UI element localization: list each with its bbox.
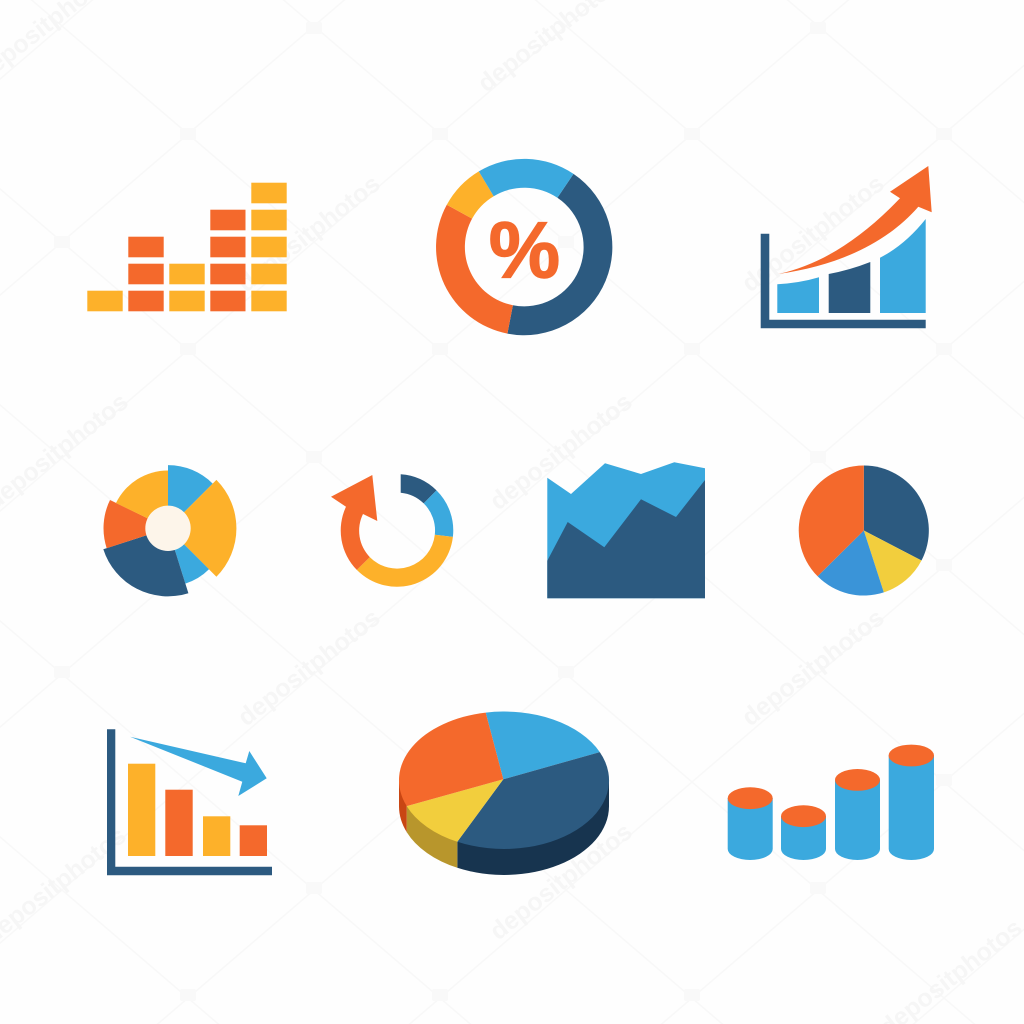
rising arrow bbox=[778, 166, 932, 274]
icon: circular refresh arrow bbox=[331, 474, 453, 587]
stock watermark: depositphotos bbox=[485, 388, 638, 516]
falling arrow bbox=[130, 737, 267, 796]
icon: stepped block bar chart bbox=[87, 183, 287, 311]
icon: percent donut chart bbox=[436, 159, 612, 335]
icon: declining bar chart with arrow bbox=[107, 729, 272, 875]
stock watermark: depositphotos bbox=[233, 604, 386, 732]
icon: flat pie chart bbox=[799, 465, 929, 596]
icon: radial segmented chart bbox=[103, 465, 236, 596]
icon: area chart bbox=[547, 462, 705, 598]
icon: cylinder bar chart bbox=[728, 745, 934, 860]
stock watermark: depositphotos bbox=[737, 604, 890, 732]
stock watermark: depositphotos bbox=[233, 170, 386, 298]
icon: 3D pie chart bbox=[399, 712, 609, 875]
stock watermark: depositphotos bbox=[737, 170, 890, 298]
icon: growth bars with rising arrow bbox=[761, 166, 932, 328]
percent sign: % bbox=[489, 206, 560, 294]
stock watermark: depositphotos bbox=[485, 818, 638, 946]
